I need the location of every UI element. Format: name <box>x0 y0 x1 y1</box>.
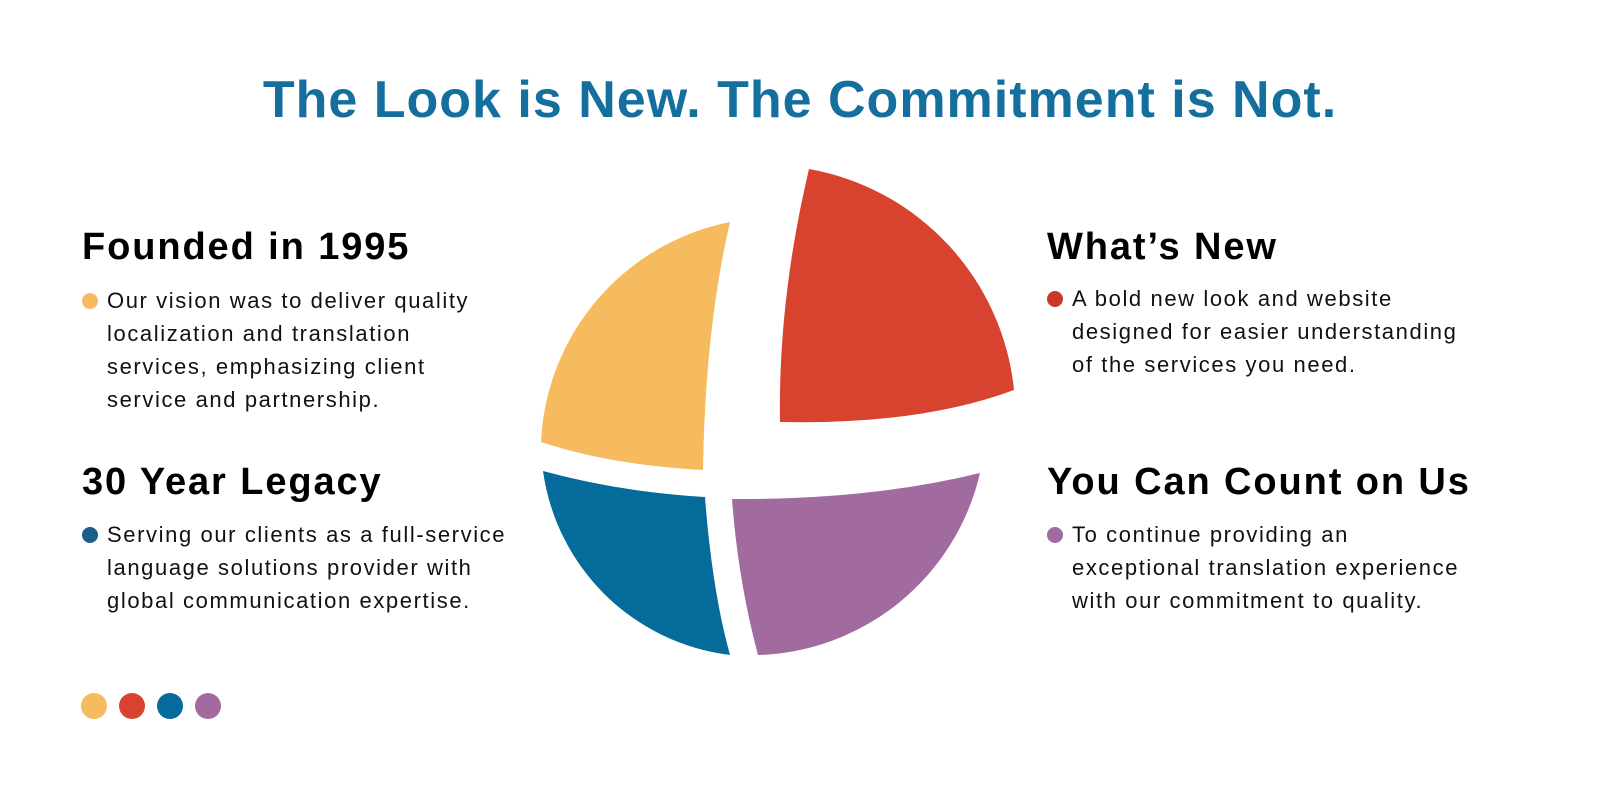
legend dots <box>81 693 221 719</box>
text: founded: Our vision was to deliver quality <box>107 288 469 313</box>
text: new: A bold new look and website <box>1072 286 1393 311</box>
text: count <box>1047 522 1459 613</box>
segment: red <box>780 169 1014 422</box>
text: new <box>1047 286 1457 377</box>
text: founded: services, emphasizing client <box>107 354 426 379</box>
text: new: designed for easier understanding <box>1072 319 1457 344</box>
text: legacy: global communication expertise. <box>107 588 471 613</box>
text: founded: localization and translation <box>107 321 411 346</box>
heading: new: What’s New <box>1047 226 1278 268</box>
text: founded <box>82 288 469 412</box>
text: legacy <box>82 522 506 613</box>
segment: purple <box>732 473 980 655</box>
text: count: To continue providing an <box>1072 522 1349 547</box>
heading: legacy: 30 Year Legacy <box>82 461 383 503</box>
segment: yellow <box>541 222 730 470</box>
heading: founded: Founded in 1995 <box>82 226 410 268</box>
title: The Look is New. The Commitment is Not. <box>263 71 1337 129</box>
text: founded: service and partnership. <box>107 387 380 412</box>
text: legacy: Serving our clients as a full-service <box>107 522 506 547</box>
text: count: exceptional translation experience <box>1072 555 1459 580</box>
heading: count: You Can Count on Us <box>1047 461 1471 503</box>
text: legacy: language solutions provider with <box>107 555 473 580</box>
text: count: with our commitment to quality. <box>1072 588 1423 613</box>
text: new: of the services you need. <box>1072 352 1357 377</box>
segment: blue <box>543 471 730 655</box>
